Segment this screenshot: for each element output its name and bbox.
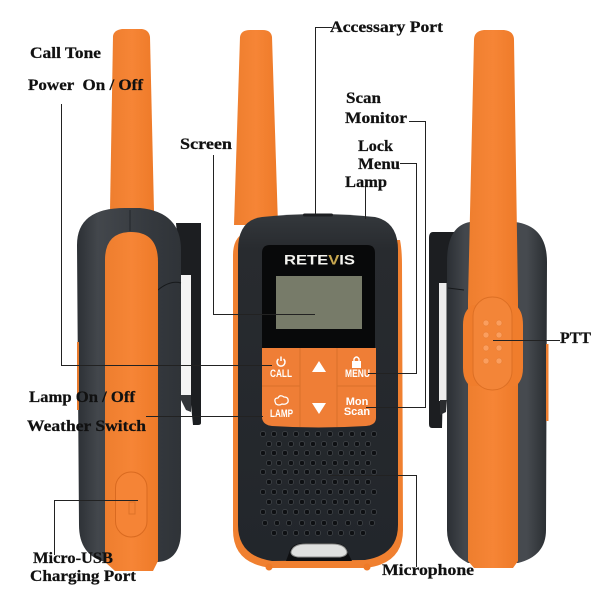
left body <box>77 208 181 562</box>
center orange back shell <box>233 232 403 568</box>
center body <box>238 214 398 561</box>
MENU key: MENU <box>345 368 370 380</box>
label: Weather Switch: Weather Switch <box>27 418 146 435</box>
left antenna <box>110 29 154 211</box>
LCD screen <box>276 276 362 329</box>
label: Charging Port: Charging Port <box>30 568 137 585</box>
leader line: microphone <box>330 476 416 567</box>
right orange band and antenna <box>468 30 518 568</box>
label: Scan: Scan <box>346 90 381 107</box>
label: Lock: Lock <box>358 138 393 155</box>
label: Micro-USB: Micro-USB <box>33 550 113 567</box>
center antenna <box>234 30 278 225</box>
belt clip right <box>429 232 456 428</box>
label: Microphone: Microphone <box>382 562 474 579</box>
keypad <box>262 348 376 428</box>
label: Screen: Screen <box>180 136 232 153</box>
Mon Scan key <box>344 396 370 418</box>
label: Call Tone: Call Tone <box>30 45 101 62</box>
lock icon <box>352 357 361 368</box>
logo: RETE VIS <box>284 252 355 268</box>
up arrow <box>312 361 326 372</box>
CALL key: CALL <box>270 368 292 380</box>
leader line: micro-usb <box>54 500 138 555</box>
right body <box>447 222 547 563</box>
cloud lamp icon <box>275 396 288 405</box>
leader line: screen <box>214 155 315 314</box>
label: Accessary Port: Accessary Port <box>330 19 444 36</box>
label: Lamp: Lamp <box>345 174 387 191</box>
label: Monitor: Monitor <box>345 110 407 127</box>
speaker grille <box>260 431 377 536</box>
left side orange band <box>105 232 158 571</box>
right radio <box>429 30 548 568</box>
leader line: weather switch <box>146 416 263 418</box>
micro-usb cover <box>116 472 147 537</box>
belt clip left <box>176 223 201 425</box>
power icon <box>277 356 285 366</box>
label: Menu: Menu <box>358 156 400 173</box>
PTT button <box>463 297 523 390</box>
lanyard slot <box>286 543 352 561</box>
Mon Scan key: Scan <box>344 406 370 418</box>
leader line: monitor <box>366 122 426 408</box>
leader line: lamp <box>364 185 366 219</box>
leader line: accessory port <box>316 28 332 214</box>
label: Lamp On / Off: Lamp On / Off <box>29 389 136 406</box>
down arrow <box>312 403 326 414</box>
LAMP key: LAMP <box>270 408 293 420</box>
accessory port cap <box>303 214 333 216</box>
leader line: power on/off <box>62 104 272 366</box>
leader line: PTT <box>493 340 560 342</box>
left radio <box>77 29 201 571</box>
label: PTT: PTT <box>560 330 591 347</box>
screen bezel <box>262 245 375 350</box>
leader line: menu <box>368 164 416 374</box>
label: Power On / Off: Power On / Off <box>28 77 144 94</box>
right side key strip <box>546 344 548 421</box>
center radio <box>233 30 403 570</box>
feet <box>266 564 370 570</box>
Mon Scan key: Mon <box>346 396 369 408</box>
